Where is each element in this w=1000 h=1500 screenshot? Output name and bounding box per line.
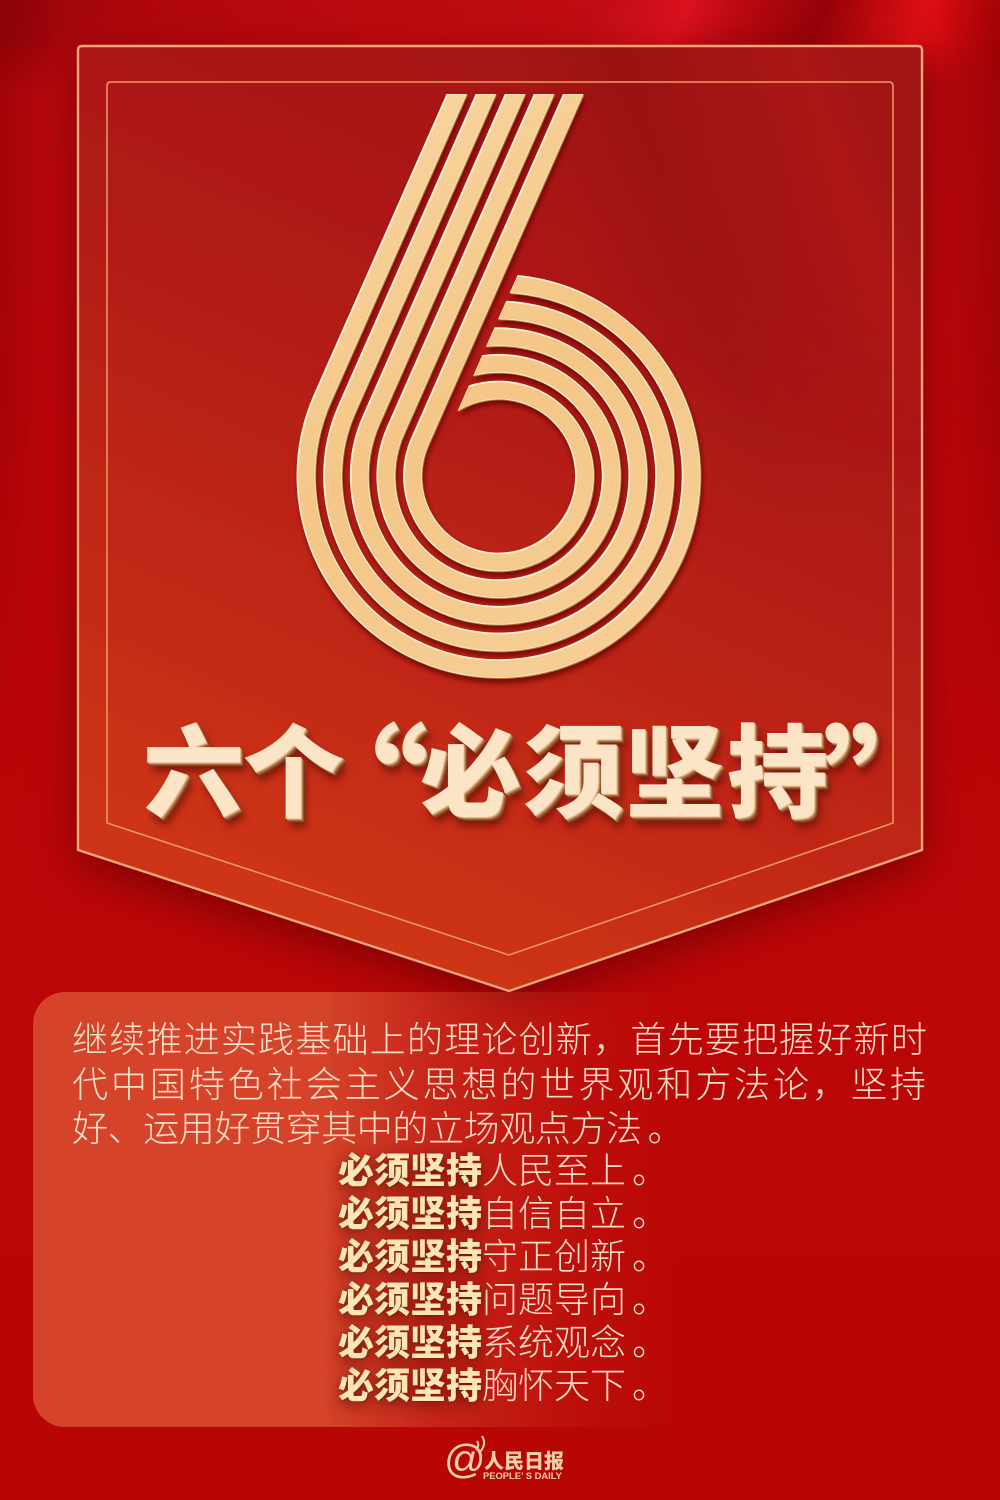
list of six principles: 必须坚持系统观念。	[338, 1322, 668, 1363]
intro paragraph: 代中国特色社会主义思想的世界观和方法论，坚持	[72, 1064, 929, 1105]
list of six principles: 必须坚持守正创新。	[338, 1236, 668, 1277]
title: 六个“必须坚持”: “	[298, 684, 428, 872]
list of six principles	[332, 1148, 668, 1414]
title: 六个“必须坚持”: 持	[727, 693, 828, 839]
logo: People's Daily: 人民日报	[484, 1445, 564, 1474]
big number 6 made of five gold stripes	[306, 80, 693, 674]
text panel with fading background	[33, 992, 970, 1427]
title: 六个“必须坚持”: 须	[523, 693, 624, 839]
intro paragraph: 好、运用好贯穿其中的立场观点方法。	[72, 1108, 683, 1149]
intro paragraph: 继续推进实践基础上的理论创新，首先要把握好新时	[72, 1019, 928, 1060]
list of six principles: 必须坚持自信自立。	[338, 1193, 668, 1234]
title: 六个“必须坚持”: 必	[420, 693, 521, 839]
list of six principles: 必须坚持问题导向。	[338, 1279, 668, 1320]
title: 六个“必须坚持”: 六	[143, 693, 244, 839]
title: 六个“必须坚持”: ”	[823, 684, 953, 872]
logo: People's Daily	[444, 1436, 564, 1482]
intro paragraph	[72, 1019, 929, 1149]
inner gold frame	[107, 82, 893, 955]
list of six principles: 必须坚持人民至上。	[338, 1150, 668, 1191]
title: 六个“必须坚持”: 个	[243, 693, 344, 839]
logo: People's Daily: PEOPLE’ S DAILY	[483, 1470, 563, 1481]
logo: People's Daily: @	[444, 1436, 486, 1482]
title: 六个“必须坚持”	[143, 684, 953, 872]
list of six principles: 必须坚持胸怀天下。	[338, 1365, 668, 1406]
pennant banner panel	[54, 30, 946, 1018]
background with red silk ribbons	[0, 0, 1000, 636]
title: 六个“必须坚持”: 坚	[624, 693, 725, 839]
